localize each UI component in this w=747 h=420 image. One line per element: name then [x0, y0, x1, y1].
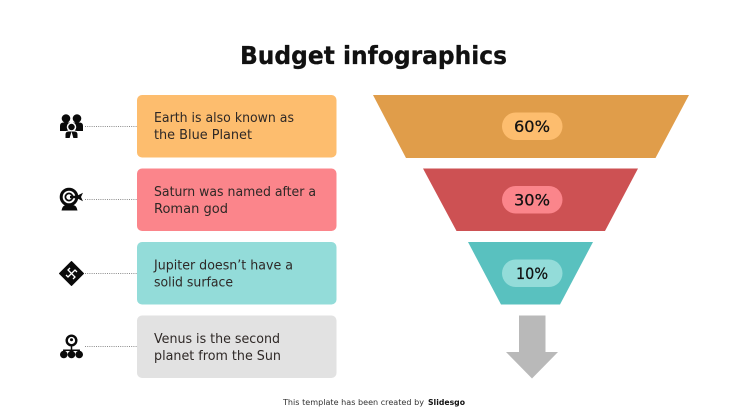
title: Budget infographics — [240, 41, 507, 70]
connector: row 4 — [85, 346, 137, 348]
icon: target with arrow — [61, 189, 83, 210]
panel: Earth card: Earth is also known as — [154, 111, 294, 126]
connector: row 3 — [85, 272, 137, 274]
funnel segment: 30%: 30% — [514, 190, 550, 210]
funnel segment: 60% — [373, 95, 689, 158]
arrow: down — [506, 316, 558, 378]
panel: Venus card: Venus is the second — [154, 332, 280, 347]
funnel segment: 60%: 60% — [514, 117, 550, 136]
icon: group of people — [60, 114, 83, 138]
panel: Saturn card — [137, 168, 336, 231]
panel: Saturn card: Saturn was named after a — [154, 185, 316, 200]
panel: Jupiter card: Jupiter doesn’t have a — [153, 258, 293, 274]
panel: Earth card — [137, 95, 336, 158]
icon: hierarchy — [60, 336, 83, 358]
footer credit: Slidesgo — [428, 398, 465, 407]
panel: Venus card — [137, 316, 336, 378]
funnel segment: 10% — [468, 242, 593, 304]
footer credit: This template has been created by — [282, 398, 425, 407]
panel: Saturn card: Roman god — [154, 202, 228, 217]
panel: Venus card: planet from the Sun — [154, 349, 281, 364]
panel: Jupiter card: solid surface — [154, 276, 233, 290]
funnel segment: 10%: 10% — [516, 264, 548, 283]
panel: Jupiter card — [137, 242, 336, 304]
funnel segment: 30% — [423, 168, 638, 231]
panel: Earth card: the Blue Planet — [154, 128, 252, 143]
icon: diamond pinwheel — [60, 262, 84, 286]
connector: row 2 — [85, 198, 137, 200]
connector: row 1 — [85, 126, 137, 128]
